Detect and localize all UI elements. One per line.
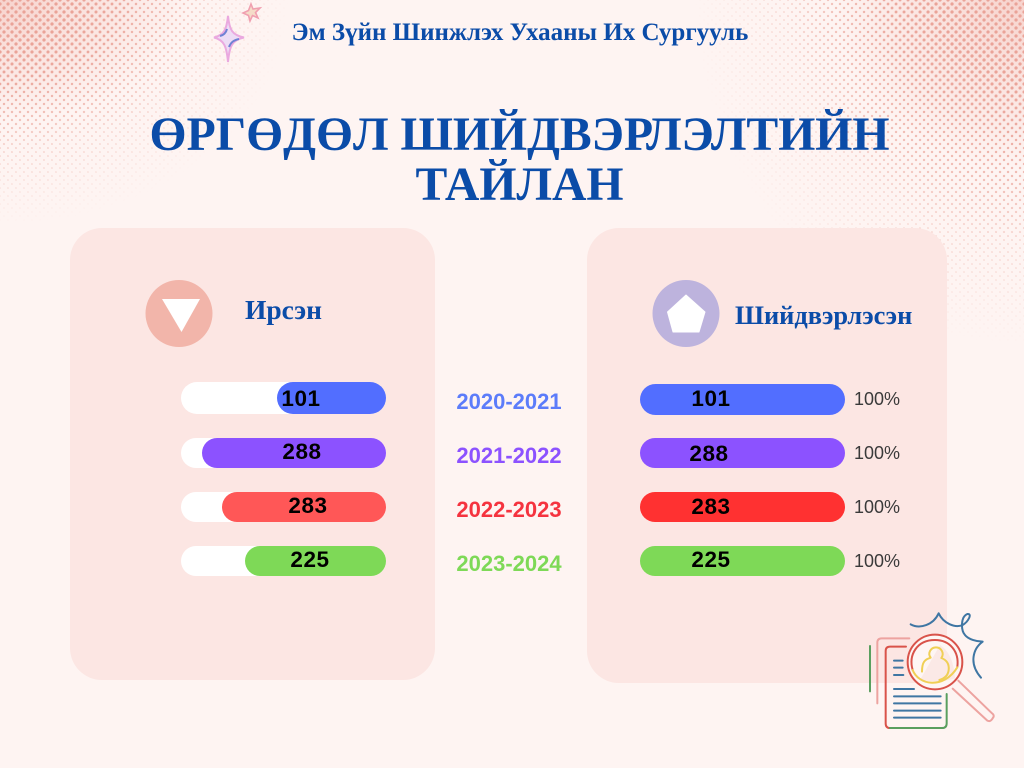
- year labels: 2020-2021: [456, 389, 562, 414]
- title: ӨРГӨДӨЛ ШИЙДВЭРЛЭЛТИЙН: [150, 108, 890, 161]
- bar chart: received: [181, 382, 386, 576]
- bar: 2023-2024 resolved: [640, 546, 900, 576]
- bar: 2023-2024 resolved: 225: [691, 547, 731, 572]
- heading: resolved: Шийдвэрлэсэн: [735, 300, 912, 330]
- bar: 2022-2023 resolved: 100%: [854, 497, 900, 517]
- bar: 2021-2022 resolved: [640, 438, 900, 468]
- header: university name: Эм Зүйн Шинжлэх Ухааны Их Сургууль: [292, 19, 748, 46]
- bar: 2023-2024 received: 225: [290, 547, 330, 572]
- bar: 2021-2022 received: 288: [282, 439, 322, 464]
- bar: 2020-2021 resolved: 100%: [854, 389, 900, 409]
- bar: 2021-2022 resolved: 100%: [854, 443, 900, 463]
- panel: resolved applications: [587, 228, 947, 683]
- title: [150, 108, 890, 211]
- bar: 2020-2021 resolved: 101: [691, 386, 731, 411]
- halftone background: [0, 0, 1024, 328]
- bar: 2022-2023 received: [181, 492, 386, 522]
- year labels: [456, 389, 562, 576]
- bar: 2020-2021 resolved: [640, 384, 900, 415]
- bar: 2023-2024 received: [181, 546, 386, 576]
- bar: 2022-2023 resolved: 283: [691, 494, 731, 519]
- bar chart: resolved: [640, 384, 900, 576]
- bar: 2023-2024 resolved: 100%: [854, 551, 900, 571]
- bar: 2020-2021 received: 101: [281, 386, 321, 411]
- year labels: 2023-2024: [456, 551, 562, 576]
- bar: 2021-2022 received: [181, 438, 386, 468]
- panel: received applications: [70, 228, 435, 680]
- bar: 2021-2022 resolved: 288: [689, 441, 729, 466]
- year labels: 2021-2022: [456, 443, 562, 468]
- bar: 2022-2023 resolved: [640, 492, 900, 522]
- bar: 2022-2023 received: 283: [288, 493, 328, 518]
- year labels: 2022-2023: [456, 497, 562, 522]
- heading: received: Ирсэн: [245, 294, 322, 325]
- title: ТАЙЛАН: [415, 158, 624, 211]
- bar: 2020-2021 received: [181, 382, 386, 414]
